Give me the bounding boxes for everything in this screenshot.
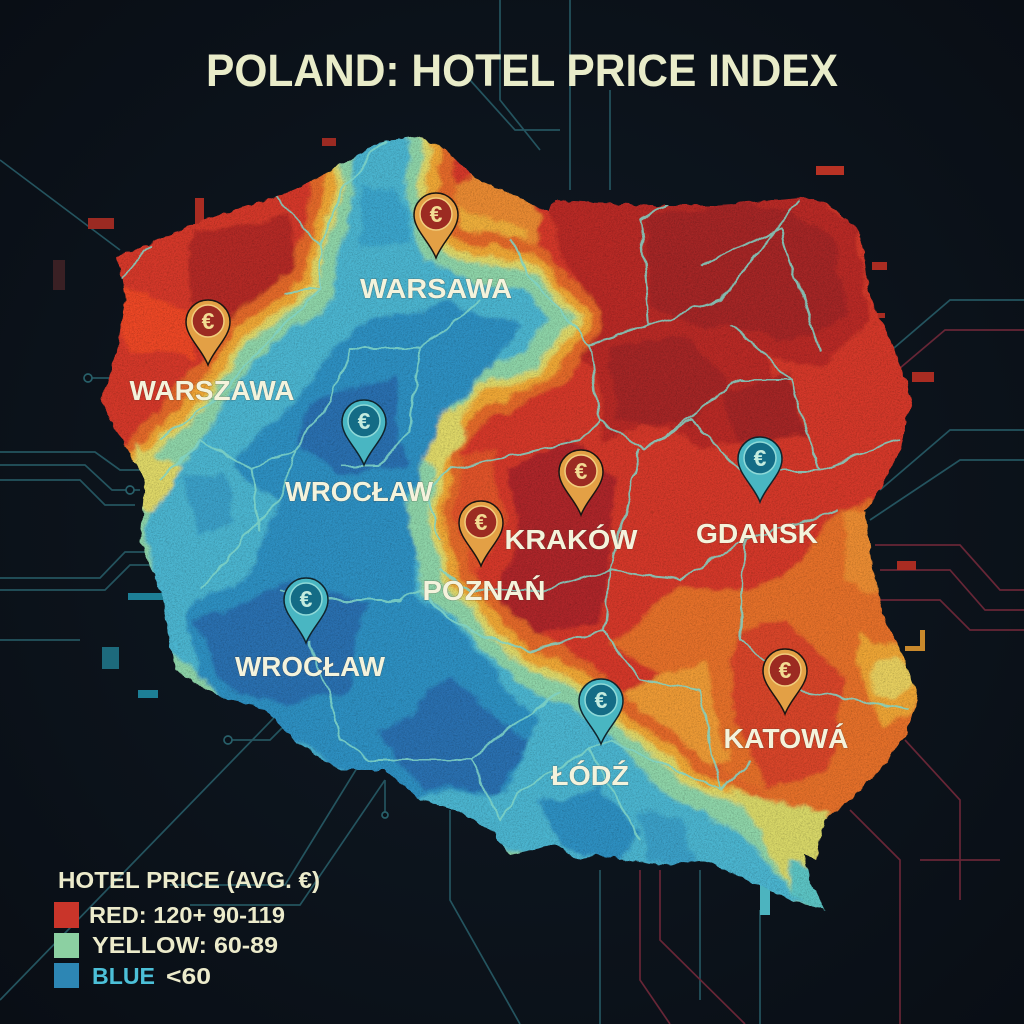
dark blue pockets: [300, 375, 405, 475]
legend swatch: yellow: [54, 933, 79, 958]
south-east orange: [608, 496, 918, 817]
pin: Wrocław north: [342, 400, 386, 465]
pin: Katowá: [763, 649, 807, 714]
legend swatch: blue: [54, 963, 79, 988]
city labels: KRAKÓW: [504, 524, 638, 555]
dark red north-east: [545, 180, 865, 445]
city labels: [130, 273, 848, 791]
region border lines: [120, 140, 910, 840]
cool region with banded edges: [125, 130, 830, 925]
pin: Wrocław south: [284, 578, 328, 643]
yellow south-east tail: [728, 785, 832, 889]
city labels: KATOWÁ: [724, 723, 848, 754]
legend: [54, 867, 320, 989]
legend text: blue: BLUE: [92, 963, 155, 989]
base warm layer: [114, 202, 912, 854]
city labels: GDANSK: [696, 518, 818, 549]
legend text: red: RED: 120+ 90-119: [89, 902, 285, 928]
cyan interior: [150, 130, 810, 905]
legend text: yellow: YELLOW: 60-89: [92, 932, 278, 958]
pin: Kraków: [559, 450, 603, 515]
pin: Łódź: [579, 679, 623, 744]
north orange: [452, 173, 544, 247]
city labels: WROCŁAW: [285, 476, 434, 507]
blue body: [185, 305, 540, 800]
legend text: under 60: <60: [166, 963, 211, 989]
city labels: WARSAWA: [360, 273, 512, 304]
decorative glitch blocks: [53, 138, 934, 915]
city labels: WARSZAWA: [130, 375, 294, 406]
legend swatch: red: [54, 902, 79, 928]
north-west warm: [95, 165, 340, 440]
heat map of Poland: [100, 136, 918, 911]
pin: Warszawa: [186, 300, 230, 365]
title: POLAND: HOTEL PRICE INDEX: [206, 45, 838, 96]
pin: Gdansk: [738, 437, 782, 502]
legend heading: HOTEL PRICE (AVG. €): [58, 867, 320, 893]
central dark red: [490, 440, 615, 635]
pin: Poznań: [459, 501, 503, 566]
city labels: POZNAŃ: [422, 575, 546, 606]
pin: Warsawa: [414, 193, 458, 258]
city labels: ŁÓDŹ: [551, 760, 629, 791]
city labels: WROCŁAW: [235, 651, 386, 682]
